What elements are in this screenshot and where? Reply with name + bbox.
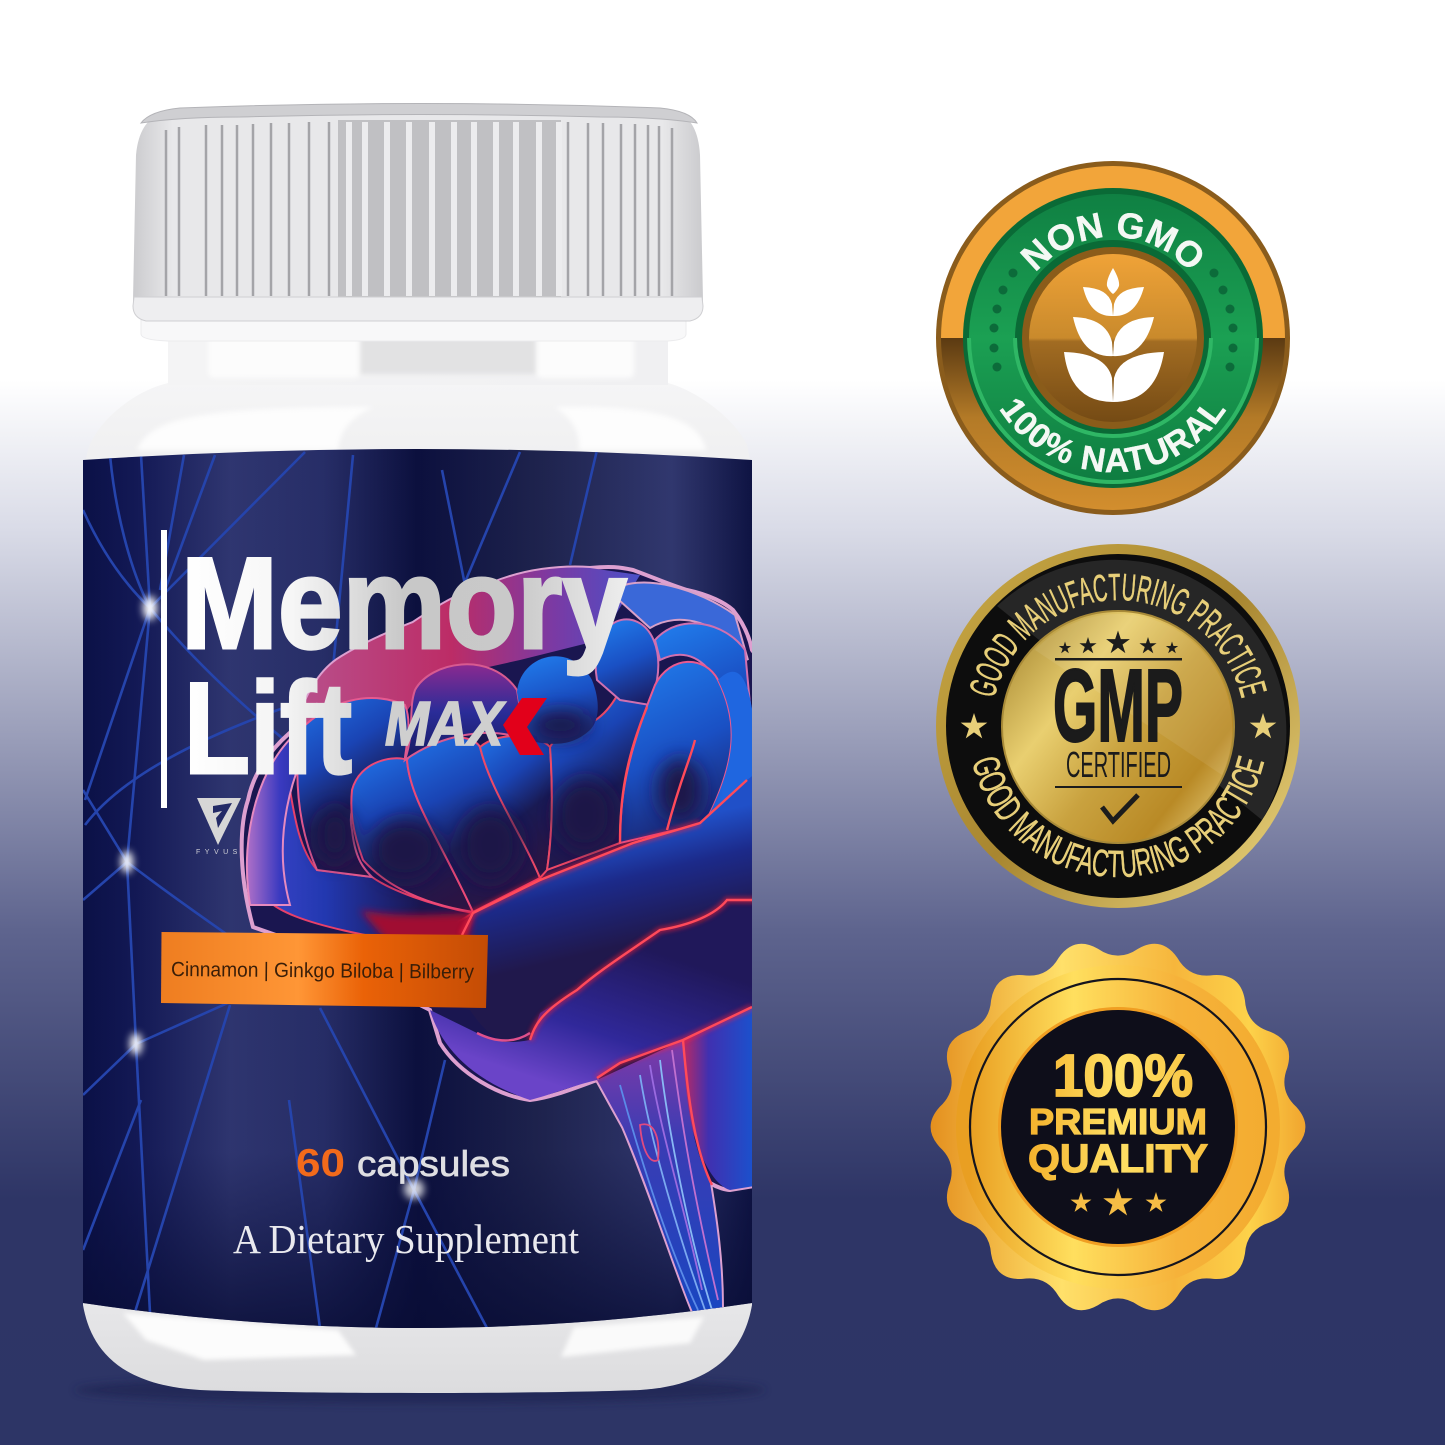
- outer gold rim: [936, 544, 1300, 908]
- brain silhouette: [242, 567, 760, 1312]
- center ribbed panel: [338, 120, 561, 297]
- network lines: [83, 450, 597, 1328]
- lobe: sixth fold: [547, 690, 650, 870]
- supplement tagline: A Dietary Supplement: [233, 1216, 580, 1262]
- left outer lobes: [246, 738, 296, 906]
- banner text: Cinnamon | Ginkgo Biloba | Bilberry: [171, 958, 475, 984]
- gold centre: [1002, 611, 1234, 843]
- scalloped seal: [931, 944, 1305, 1310]
- lobe: top blue: [517, 656, 598, 744]
- divider bottom: [1055, 786, 1182, 788]
- lobe: top right arch: [610, 583, 748, 660]
- bottle neck: [168, 325, 668, 385]
- text: QUALITY: QUALITY: [1028, 1137, 1208, 1181]
- dark centre: [998, 1007, 1238, 1247]
- cap lower band: [133, 297, 703, 321]
- side stars: [961, 713, 1276, 738]
- thin ring: [970, 979, 1266, 1275]
- cap shell: [133, 103, 703, 321]
- side rib lines: [166, 122, 672, 296]
- brain illustration: [242, 567, 760, 1312]
- banner shape: [161, 932, 488, 1008]
- badge text: NON GMO: NON GMO: [1020, 212, 1202, 272]
- bottom highlights: [123, 1313, 704, 1360]
- brain red veins: [462, 707, 760, 1185]
- bottle base shadow: [75, 1376, 765, 1404]
- lobe: arch purple: [405, 664, 525, 760]
- ring dots: [990, 268, 1238, 372]
- text: PREMIUM: PREMIUM: [1029, 1101, 1207, 1142]
- product bottle: [75, 103, 765, 1404]
- MAX text: MAX: [385, 690, 506, 759]
- lobe: fourth fold: [407, 737, 540, 912]
- MAX wordmark: [385, 698, 547, 755]
- text: 100%: 100%: [1053, 1043, 1193, 1109]
- lobe: fifth fold: [480, 736, 552, 878]
- GMP letters: GMP: [1053, 648, 1183, 763]
- lobe: right upper: [654, 622, 751, 703]
- wheat icon: [1064, 268, 1164, 402]
- glowing node stars: [121, 596, 424, 1199]
- centre sheen: [1035, 614, 1232, 775]
- label: [83, 440, 760, 1340]
- lobe: rear lower: [273, 792, 472, 934]
- green ring: [963, 188, 1263, 488]
- brain dark pockets: [317, 711, 702, 881]
- ring sheen: [997, 560, 1286, 820]
- capsules word: capsules: [357, 1143, 510, 1184]
- vertical white rule: [161, 530, 167, 808]
- neck panels: [208, 328, 634, 378]
- rim text: bottom: GOOD MANUFACTURING PRACTICE: [973, 755, 1264, 878]
- lobe: seventh fold: [620, 662, 732, 843]
- shoulder highlights: [137, 407, 706, 450]
- center rib highlights: [349, 122, 559, 296]
- badge: 100% Premium Quality: [931, 944, 1305, 1310]
- cerebellum: [684, 1008, 752, 1190]
- seal inner disc: [956, 965, 1280, 1289]
- lobe: upper centre blue: [596, 619, 658, 705]
- cap: [133, 103, 703, 321]
- FYVUS logo: [196, 798, 242, 856]
- capsule count: 60: [296, 1142, 345, 1185]
- top stars: [1059, 630, 1178, 653]
- stem fibres: [620, 1050, 718, 1310]
- temporal lobe lower: [430, 900, 760, 1100]
- CERTIFIED: CERTIFIED: [1066, 744, 1171, 785]
- rim text: top: GOOD MANUFACTURING PRACTICE: [970, 574, 1267, 698]
- bottle body: [83, 383, 752, 1393]
- label background: [83, 440, 752, 1340]
- brain red vein glow: [462, 823, 760, 1078]
- frontal underside glow: [358, 906, 478, 935]
- badge: GMP Certified: [936, 544, 1300, 908]
- badge: Non GMO 100% Natural: [936, 161, 1290, 515]
- ingredient banner: [161, 932, 488, 1008]
- inner core: [1015, 240, 1211, 436]
- stars: [1071, 1188, 1166, 1216]
- red chevron: [503, 698, 547, 755]
- lobe: rear upper: [297, 698, 409, 877]
- brain stem: [597, 1040, 722, 1312]
- right strip lobe: [710, 672, 752, 812]
- title: Memory: Memory: [181, 530, 627, 676]
- logo name: FYVUS: [196, 849, 242, 856]
- black ring: [946, 554, 1290, 898]
- check mark: [1102, 795, 1138, 821]
- top magenta band: [297, 568, 640, 735]
- lobe: third fold: [351, 758, 473, 912]
- divider top: [1055, 658, 1182, 660]
- temporal lobe upper: [467, 776, 752, 964]
- logo mark: [197, 798, 241, 845]
- neck collar: [141, 320, 686, 341]
- badge outer ring: [936, 161, 1290, 515]
- title: Lift: Lift: [184, 655, 352, 801]
- cap top rim: [141, 104, 697, 123]
- badge text: 100% NATURAL: 100% NATURAL: [1000, 398, 1226, 472]
